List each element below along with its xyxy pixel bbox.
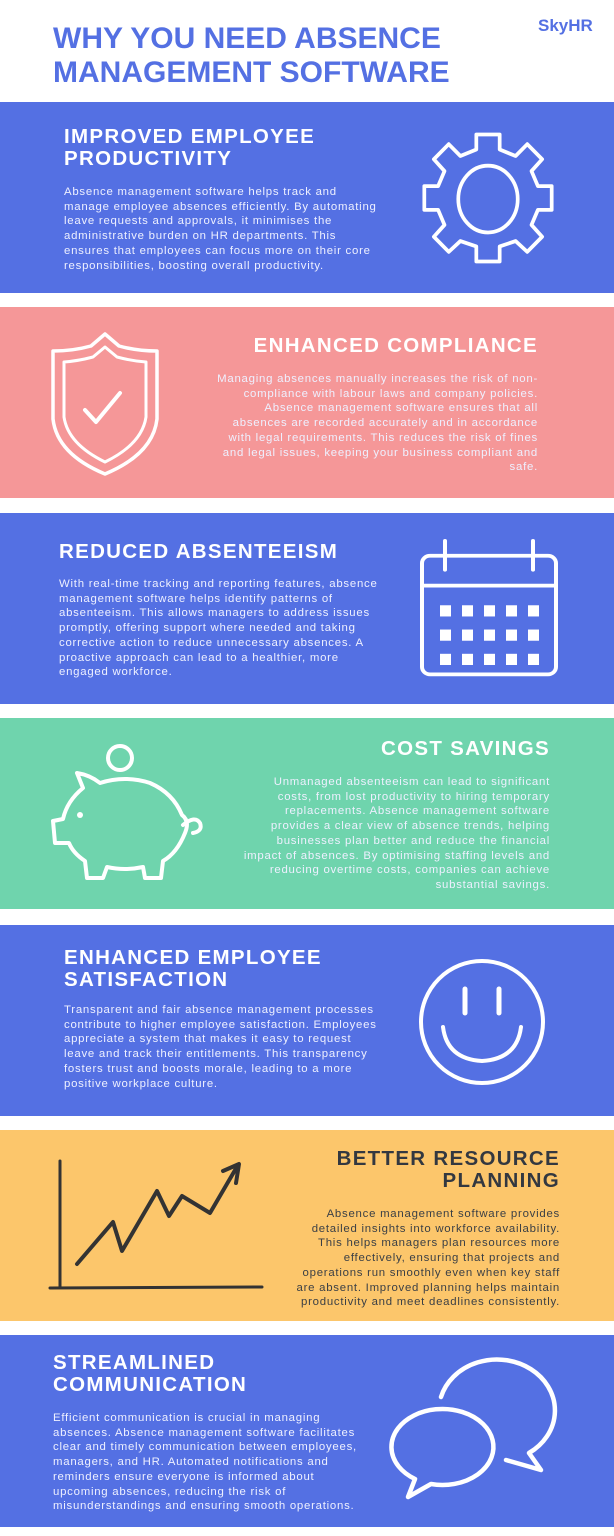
text block: administrative burden on HR departments. This — [64, 230, 336, 242]
text block: Transparent and fair absence management processes — [64, 1004, 374, 1016]
heading: COST SAVINGS — [381, 737, 550, 760]
heading — [64, 125, 315, 170]
heading: IMPROVED EMPLOYEE — [64, 125, 315, 148]
text block: This helps managers plan resources more — [318, 1237, 560, 1249]
text block: upcoming absences, reducing the risk of — [53, 1486, 286, 1498]
text block: substantial savings. — [436, 879, 550, 891]
panel: absenteeism — [0, 513, 614, 704]
heading: ENHANCED EMPLOYEE — [64, 946, 322, 969]
text block — [244, 776, 550, 891]
icon: shield — [51, 332, 159, 476]
text block: appreciate a system that makes it easy to request — [64, 1033, 351, 1045]
text block: replacements. Absence management software — [285, 805, 550, 817]
text block: productivity and meet deadlines consistently. — [301, 1296, 560, 1308]
text block: detailed insights into workforce availability. — [312, 1223, 560, 1235]
text block: Absence management software provides — [327, 1208, 560, 1220]
text block — [59, 578, 378, 678]
icon: smiley — [419, 959, 545, 1085]
logo: SkyHR — [538, 16, 593, 35]
text block: safe. — [510, 461, 538, 473]
heading: PRODUCTIVITY — [64, 147, 232, 170]
text block: With real-time tracking and reporting features, absence — [59, 578, 378, 590]
panel: resource planning — [0, 1130, 614, 1321]
text block: contribute to higher employee satisfaction. Employees — [64, 1019, 377, 1031]
heading: ENHANCED COMPLIANCE — [254, 334, 538, 357]
text block: businesses plan better and reduce the financial — [277, 835, 550, 847]
text block: Managing absences manually increases the risk of non- — [217, 373, 538, 385]
icon: speech bubbles — [389, 1357, 558, 1500]
heading: REDUCED ABSENTEEISM — [59, 540, 338, 563]
heading: STREAMLINED — [53, 1351, 215, 1374]
text block: Absence management software ensures that all — [264, 402, 538, 414]
panel: cost savings — [0, 718, 614, 909]
text block: Absence management software helps track and — [64, 186, 337, 198]
text block: reminders ensure everyone is informed about — [53, 1471, 314, 1483]
title: WHY YOU NEED ABSENCE — [53, 22, 441, 55]
title: MANAGEMENT SOFTWARE — [53, 56, 450, 89]
text block: Unmanaged absenteeism can lead to significant — [274, 776, 550, 788]
text block: managers, and HR. Automated notifications and — [53, 1456, 329, 1468]
heading — [53, 1351, 247, 1396]
text block: impact of absences. By optimising staffing levels and — [244, 850, 550, 862]
text block: proactive approach can lead to a healthier, more — [59, 652, 339, 664]
text block: ensures that employees can focus more on their core — [64, 245, 371, 257]
heading — [337, 1147, 560, 1192]
text block: engaged workforce. — [59, 666, 173, 678]
panel: productivity — [0, 102, 614, 293]
icon: chart — [48, 1160, 264, 1290]
text block: leave and track their entitlements. This transparency — [64, 1048, 368, 1060]
text block: with legal requirements. This reduces the risk of fines — [229, 432, 538, 444]
text block: fosters trust and boosts morale, leading to a more — [64, 1063, 352, 1075]
text block: costs, from lost productivity to hiring temporary — [278, 791, 550, 803]
text block: manage employee absences efficiently. By automating — [64, 201, 377, 213]
panel: satisfaction — [0, 925, 614, 1116]
heading: COMMUNICATION — [53, 1373, 247, 1396]
panel: communication — [0, 1335, 614, 1527]
heading: SATISFACTION — [64, 968, 228, 991]
heading — [64, 946, 322, 991]
text block: leave requests and approvals, it minimises the — [64, 215, 332, 227]
text block: positive workplace culture. — [64, 1078, 218, 1090]
text block: absenteeism. This allows managers to address issues — [59, 607, 370, 619]
text block: compliance with labour laws and company policies. — [244, 388, 538, 400]
text block — [296, 1208, 560, 1308]
text block: effectively, ensuring that projects and — [344, 1252, 560, 1264]
text block — [64, 186, 377, 272]
text block: provides a clear view of absence trends, helping — [271, 820, 550, 832]
icon: calendar — [420, 539, 558, 676]
text block: operations run smoothly even when key staff — [303, 1267, 560, 1279]
heading: PLANNING — [443, 1169, 560, 1192]
text block: absences are recorded accurately and in accordance — [233, 417, 538, 429]
text block: management software helps identify patterns of — [59, 593, 333, 605]
text block — [64, 1004, 377, 1090]
heading: BETTER RESOURCE — [337, 1147, 560, 1170]
text block: and legal issues, keeping your business compliant and — [223, 447, 538, 459]
text block — [217, 373, 538, 473]
panel: compliance — [0, 307, 614, 498]
icon: piggy bank — [51, 744, 203, 880]
icon: gear — [422, 132, 554, 264]
text block: absences. Absence management software facilitates — [53, 1427, 355, 1439]
text block: reducing overtime costs, companies can achieve — [270, 864, 550, 876]
text block: misunderstandings and ensuring smooth operations. — [53, 1500, 354, 1512]
text block: clear and timely communication between employees, — [53, 1441, 357, 1453]
text block — [53, 1412, 357, 1512]
text block: Efficient communication is crucial in managing — [53, 1412, 320, 1424]
text block: corrective action to reduce unnecessary absences. A — [59, 637, 364, 649]
text block: are absent. Improved planning helps maintain — [296, 1282, 560, 1294]
text block: responsibilities, boosting overall productivity. — [64, 260, 324, 272]
title — [53, 22, 450, 89]
text block: promptly, offering support where needed and taking — [59, 622, 356, 634]
